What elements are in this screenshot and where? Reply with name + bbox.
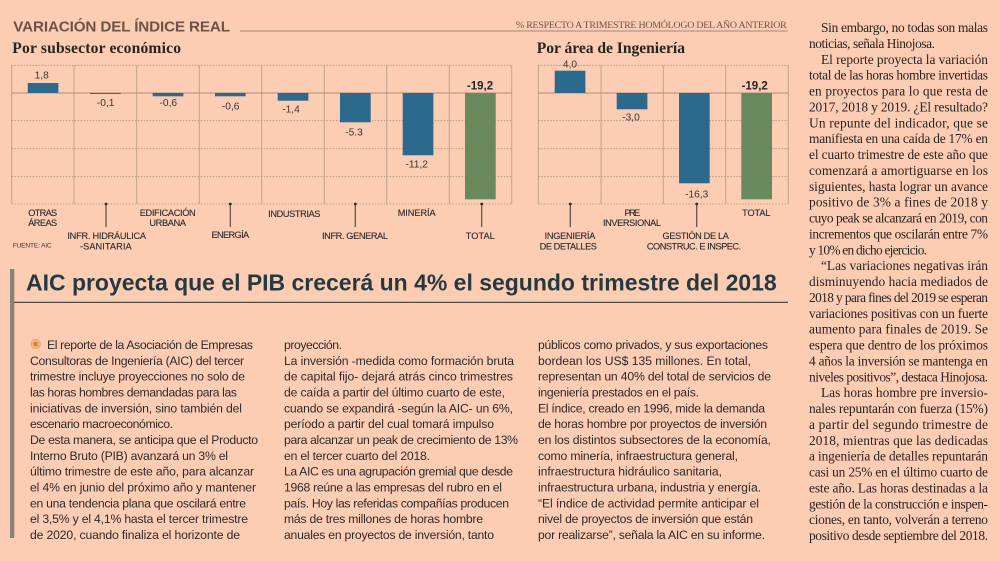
text column 3: infraestructura hidráulico sanitaria, bbox=[538, 465, 722, 479]
sidebar text column: incrementos que oscilarán entre 7% bbox=[809, 226, 988, 241]
text column 2: 1968 reúne a las empresas del rubro en el bbox=[284, 480, 502, 494]
axis labels: subsector: ÁREAS bbox=[28, 218, 57, 228]
text column 1: El reporte de la Asociación de Empresas bbox=[47, 338, 253, 352]
value labels: ingeniería bbox=[563, 60, 768, 200]
text column 1: de 2020, cuando finaliza el horizonte de bbox=[30, 528, 240, 542]
sidebar text column: 2018, mientras que las dedicadas bbox=[809, 433, 988, 448]
axis labels: ingeniería: TOTAL bbox=[742, 208, 770, 218]
value labels: subsector: -11,2 bbox=[405, 160, 428, 171]
axis labels: subsector: EDIFICACIÓN bbox=[140, 208, 196, 218]
sidebar text column: 2018 y para fines del 2019 se esperan bbox=[809, 290, 988, 305]
sidebar text column: 4 años la inversión se mantenga en bbox=[809, 353, 988, 368]
chart heading: Por subsector económico bbox=[12, 40, 181, 57]
heading: VARIACIÓN DEL ÍNDICE REAL bbox=[13, 18, 230, 36]
sidebar text column: Sin embargo, no todas son malas bbox=[821, 20, 988, 35]
unit note: % RESPECTO A TRIMESTRE HOMÓLOGO DEL AÑO ANTERIOR bbox=[516, 19, 787, 31]
text column 2: en el tercer cuarto del 2018. bbox=[284, 449, 430, 463]
sidebar text column: a ingeniería de detalles repuntarán bbox=[809, 449, 988, 464]
axis labels: ingeniería: DE DETALLES bbox=[540, 242, 597, 252]
sidebar text column: comenzará a amortiguarse en los bbox=[809, 163, 988, 178]
sidebar text column: nales repuntarán con fuerza (15%) bbox=[809, 401, 988, 416]
text column 3: bordean los US$ 135 millones. En total, bbox=[538, 354, 751, 368]
sidebar text column: “Las variaciones negativas irán bbox=[821, 258, 988, 273]
value labels: ingeniería: 4,0 bbox=[563, 60, 577, 71]
value labels: subsector: -1,4 bbox=[282, 104, 300, 115]
axis labels: subsector: INFR. GENERAL bbox=[322, 231, 388, 241]
axis labels: ingeniería: INGENIERÍA bbox=[545, 231, 596, 241]
text column 3: de horas hombre por proyectos de inversión bbox=[538, 417, 767, 431]
value labels: subsector: -0,6 bbox=[222, 102, 240, 113]
article block bbox=[10, 269, 788, 542]
sidebar text column: casi un 25% en el último cuarto de bbox=[809, 464, 988, 480]
text column 3: infraestructura urbana, industria y energía. bbox=[538, 480, 761, 494]
panel: por área de ingeniería bbox=[537, 40, 788, 252]
sidebar text column: niveles positivos”, destaca Hinojosa. bbox=[809, 369, 988, 384]
sidebar text column bbox=[809, 20, 988, 543]
text column 1 bbox=[30, 338, 258, 542]
sidebar text column: total de las horas hombre invertidas bbox=[809, 68, 988, 83]
text column 1: trimestre incluye proyecciones no solo de bbox=[30, 370, 245, 384]
text column 3: en los distintos subsectores de la economía, bbox=[538, 433, 771, 447]
sidebar text column: El reporte proyecta la variación bbox=[821, 52, 988, 67]
axis labels: ingeniería bbox=[540, 208, 770, 252]
axis labels: subsector: MINERÍA bbox=[398, 208, 437, 218]
sidebar text column: cuyo peak se alcanzará en 2019, con bbox=[809, 210, 988, 226]
bar chart: ingeniería bbox=[538, 65, 788, 204]
source note: FUENTE: AIC bbox=[13, 243, 52, 250]
sidebar text column: el cuarto trimestre de este año que bbox=[809, 147, 988, 162]
sidebar text column: Las horas hombre pre inversio- bbox=[821, 385, 988, 400]
axis labels: subsector bbox=[28, 208, 495, 252]
sidebar text column: disminuyendo hacia mediados de bbox=[809, 274, 988, 289]
text column 3: por realizarse”, señala la AIC en su informe. bbox=[538, 528, 765, 542]
sidebar text column: positivo de 3% a fines de 2018 y bbox=[809, 195, 988, 210]
text column 1: el 3,5% y el 4,1% hasta el tercer trimestre bbox=[30, 512, 248, 526]
text column 2: La inversión -medida como formación bruta bbox=[284, 354, 514, 368]
value labels: ingeniería: -16,3 bbox=[685, 189, 709, 200]
sidebar text column: Un repunte del indicador, que se bbox=[809, 115, 988, 130]
axis labels: subsector: OTRAS bbox=[28, 208, 57, 218]
leader lines: subsector bbox=[105, 203, 483, 227]
value labels: subsector: 1,8 bbox=[35, 70, 49, 81]
axis labels: ingeniería: CONSTRUC. E INSPEC. bbox=[647, 242, 741, 252]
text column 1: Interno Bruto (PIB) avanzará un 3% el bbox=[30, 449, 228, 463]
value labels: ingeniería: -3,0 bbox=[622, 112, 640, 123]
text column 2 bbox=[284, 338, 518, 542]
value labels: subsector: -0,6 bbox=[160, 98, 177, 109]
section header: variación del índice real bbox=[13, 18, 788, 36]
sidebar text column: espera que dentro de los próximos bbox=[809, 338, 988, 352]
text column 3: públicos como privados, y sus exportaciones bbox=[538, 338, 768, 352]
sidebar text column: y 10% en dicho ejercicio. bbox=[809, 242, 927, 257]
sidebar text column: aumento para finales de 2019. Se bbox=[809, 322, 988, 337]
text column 1: iniciativas de inversión, sino también del bbox=[30, 401, 242, 415]
headline: AIC proyecta que el PIB crecerá un 4% el segundo trimestre del 2018 bbox=[26, 270, 777, 296]
text column 2: anuales en proyectos de inversión, tanto bbox=[284, 528, 494, 542]
text column 1: el 4% en junio del próximo año y mantener bbox=[30, 480, 256, 494]
bar chart: subsector bbox=[12, 65, 512, 204]
icon: orange bullet bbox=[31, 339, 40, 349]
sidebar text column: gestión de la construcción e inspen- bbox=[809, 496, 988, 511]
text column 2: de capital fijo- dejará atrás cinco trimestres bbox=[284, 370, 513, 384]
value labels: ingeniería: -19,2 bbox=[742, 80, 768, 92]
text column 1: en una tendencia plana que oscilará entre bbox=[30, 496, 246, 510]
sidebar text column: ciones, en tanto, volverán a terreno bbox=[809, 512, 988, 527]
sidebar text column: variaciones positivas con un fuerte bbox=[809, 306, 988, 321]
text column 2: país. Hoy las referidas compañías producen bbox=[284, 496, 509, 510]
axis labels: ingeniería: INVERSIONAL bbox=[603, 218, 661, 228]
text column 2: de caída a partir del último cuarto de este, bbox=[284, 386, 505, 400]
text column 1: escenario macroeconómico. bbox=[30, 417, 173, 431]
axis labels: subsector: INDUSTRIAS bbox=[268, 209, 320, 219]
text column 2: período a partir del cual tomará impulso bbox=[284, 417, 494, 431]
axis labels: subsector: -SANITARIA bbox=[80, 242, 133, 252]
axis labels: subsector: INFR. HIDRÁULICA bbox=[67, 231, 147, 241]
axis labels: ingeniería: PRE bbox=[624, 208, 640, 218]
axis labels: ingeniería: GESTIÓN DE LA bbox=[663, 231, 730, 241]
text column 2: La AIC es una agrupación gremial que desde bbox=[284, 465, 513, 479]
text column 3: “El índice de actividad permite anticipar el bbox=[538, 496, 759, 510]
axis labels: subsector: URBANA bbox=[149, 218, 187, 228]
text column 1: las horas hombres demandadas para las bbox=[30, 386, 237, 400]
text column 2: más de tres millones de horas hombre bbox=[284, 512, 483, 526]
text column 1: último trimestre de este año, para alcanzar bbox=[30, 465, 254, 479]
sidebar text column: en proyectos para lo que resta de bbox=[809, 84, 988, 98]
sidebar text column: siguientes, hasta lograr un avance bbox=[809, 179, 988, 194]
text column 3: como minería, infraestructura general, bbox=[538, 449, 738, 463]
sidebar text column: 2017, 2018 y 2019. ¿El resultado? bbox=[809, 99, 988, 114]
text column 1: De esta manera, se anticipa que el Producto bbox=[30, 433, 258, 447]
text column 2: proyección. bbox=[284, 338, 342, 352]
left accent bar bbox=[10, 269, 14, 538]
value labels: subsector bbox=[35, 70, 493, 171]
text column 2: cuando se expandirá -según la AIC- un 6%, bbox=[284, 401, 513, 415]
text column 3 bbox=[538, 338, 771, 542]
value labels: subsector: -19,2 bbox=[467, 80, 493, 92]
axis labels: subsector: TOTAL bbox=[466, 231, 495, 241]
text column 3: El índice, creado en 1996, mide la demanda bbox=[538, 401, 765, 415]
sidebar text column: este año. Las horas destinadas a la bbox=[809, 480, 988, 495]
text column 1: Consultoras de Ingeniería (AIC) del tercer bbox=[30, 354, 244, 368]
sidebar text column: positivo desde septiembre del 2018. bbox=[809, 528, 988, 543]
axis labels: subsector: ENERGÍA bbox=[211, 230, 250, 240]
chart heading: Por área de Ingeniería bbox=[537, 40, 685, 57]
sidebar text column: a partir del segundo trimestre de bbox=[809, 417, 988, 432]
sidebar text column: manifiesta en una caída de 17% en bbox=[809, 131, 988, 146]
sidebar text column: noticias, señala Hinojosa. bbox=[809, 36, 935, 51]
text column 2: para alcanzar un peak de crecimiento de 13% bbox=[284, 433, 518, 447]
value labels: subsector: -0,1 bbox=[97, 98, 115, 109]
leader lines: ingeniería bbox=[569, 203, 698, 227]
text column 3: nivel de proyectos de inversión que están bbox=[538, 512, 753, 526]
text column 3: representan un 40% del total de servicios de bbox=[538, 370, 771, 384]
text column 3: ingeniería prestados en el país. bbox=[538, 386, 699, 400]
value labels: subsector: -5.3 bbox=[345, 128, 363, 139]
panel: por subsector económico bbox=[12, 40, 512, 252]
